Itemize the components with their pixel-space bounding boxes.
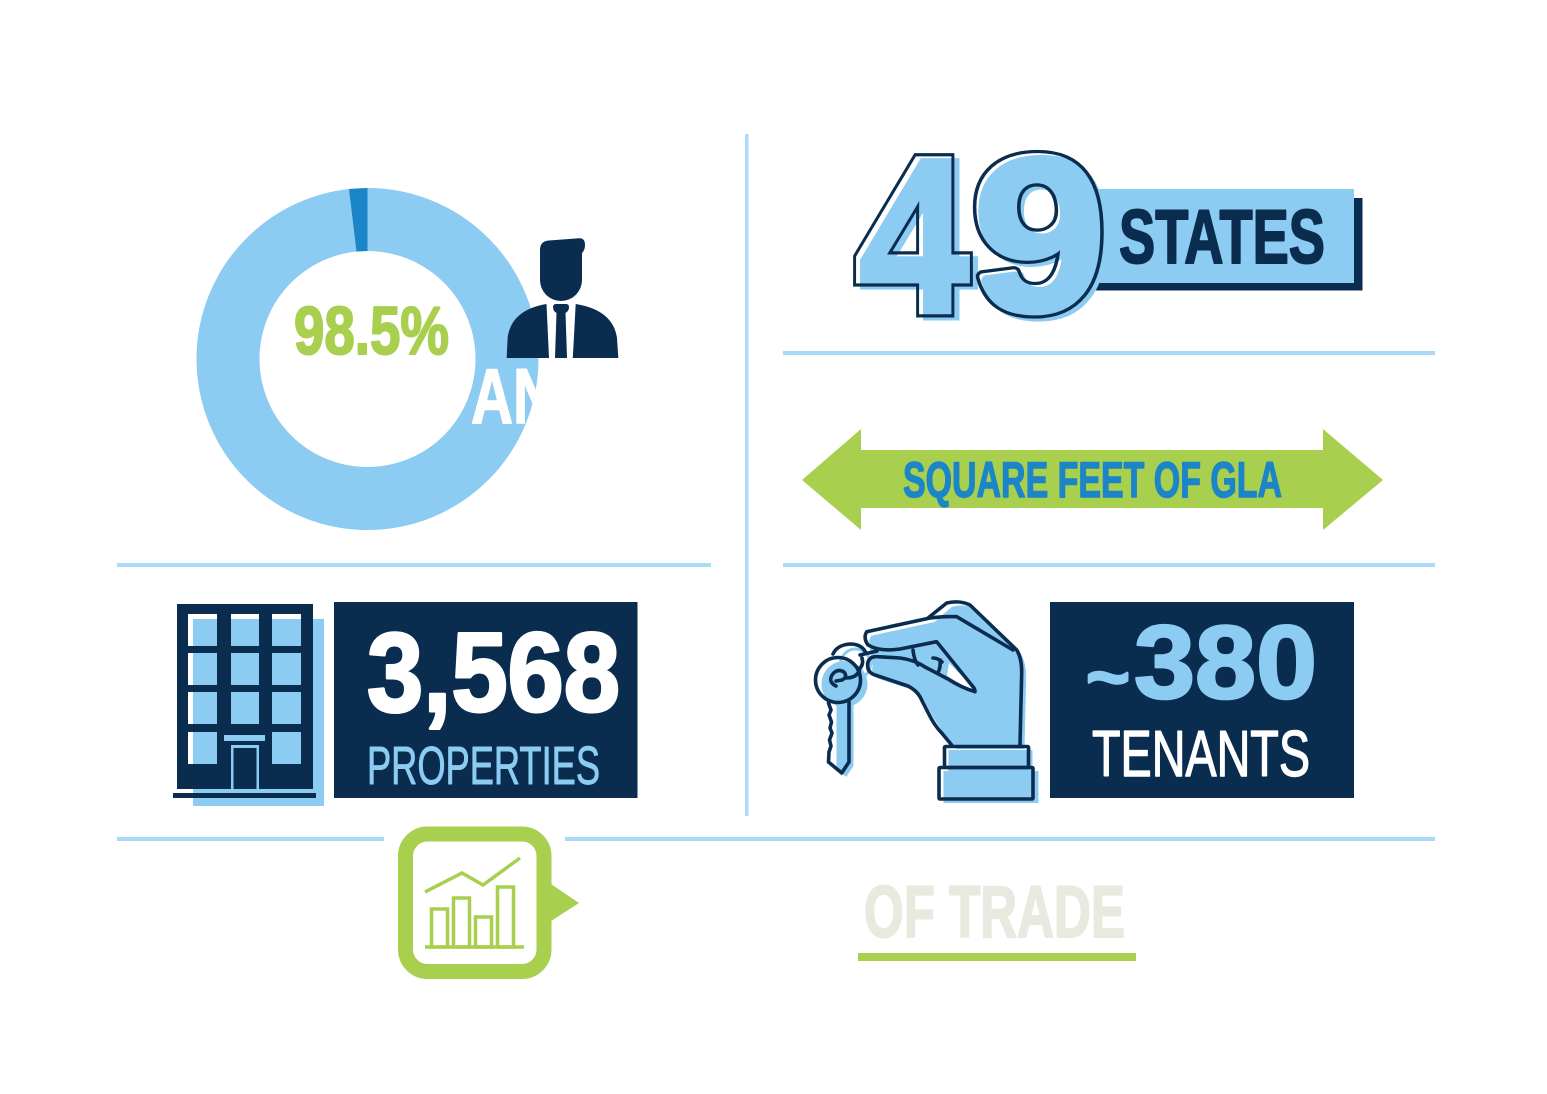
arrow label: SQUARE FEET OF GLA [903, 452, 1282, 508]
properties box: 3,568 [367, 610, 620, 735]
icon: businessman [507, 238, 618, 358]
clipped white label: AN [471, 352, 555, 440]
properties box: PROPERTIES [367, 736, 600, 796]
trade label underline [858, 953, 1136, 961]
properties box [334, 602, 638, 798]
icon: chart speech bubble [406, 834, 579, 972]
tenants box: TENANTS [1092, 717, 1310, 790]
occupancy percentage: 98.5% [294, 293, 449, 369]
panel: tenants [816, 602, 1354, 803]
big number 49 [853, 150, 1104, 322]
big number 49: 9 [976, 115, 1110, 361]
double-headed arrow [802, 429, 1383, 530]
panel: properties [173, 602, 638, 806]
tenants box: 380 [1134, 605, 1317, 721]
states banner [1090, 189, 1362, 290]
big number 49: 4 [862, 116, 974, 362]
donut chart [228, 188, 507, 498]
panel: trade [406, 834, 1136, 972]
tenants box: ~ [1086, 638, 1130, 718]
states banner: STATES [1119, 195, 1325, 280]
icon: hand holding key [816, 602, 1038, 803]
panel: square feet arrow [802, 429, 1383, 530]
panel: occupancy donut [228, 188, 618, 498]
trade label: OF TRADE [864, 872, 1125, 953]
infographic canvas [117, 134, 1435, 979]
panel: 49 states [853, 150, 1362, 322]
tenants box [1050, 602, 1354, 798]
icon: office building [173, 604, 324, 806]
